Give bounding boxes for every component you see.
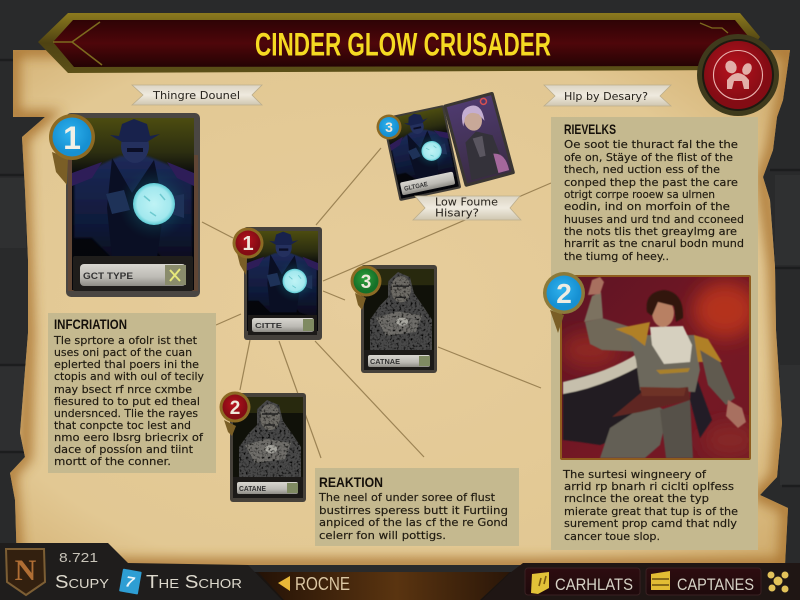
badge: red 1: 1	[242, 233, 254, 255]
text block: Revelks: ofe on, Stäye of the flist of the	[564, 153, 733, 164]
card: center figure	[244, 227, 322, 340]
back arrow	[278, 576, 290, 591]
card: gray figure lower	[230, 393, 306, 502]
ribbon: history label: Hisary?	[435, 208, 479, 220]
panel: Reaktion	[315, 468, 519, 546]
text block: portrait caption: arrid rp bnarh ri ciclti oplfess	[564, 482, 734, 493]
badge: blue 2	[543, 272, 585, 333]
heading: REAKTION	[319, 474, 383, 490]
card: blue figure, rotated: GLTGAE	[404, 181, 429, 193]
badge: blue 1	[49, 114, 95, 185]
title: CINDER GLOW CRUSADER	[255, 26, 551, 62]
text block: Revelks: the tiumg of heey..	[564, 252, 669, 263]
body text: eplerted thal poers ini the	[54, 360, 199, 371]
card label bar: CATNAE	[370, 359, 400, 366]
badge: blue 1: 1	[63, 120, 81, 156]
body text: uses oni pact of the cuan	[54, 348, 192, 359]
text block: Revelks: Oe soot tie thuract fal the the	[564, 140, 738, 151]
text block: portrait caption: The surtesi wingneery of	[562, 470, 706, 481]
card: purple hero, rotated	[443, 92, 515, 187]
body text: mortt of the conner.	[54, 457, 171, 468]
card: large blue figure with orb	[66, 113, 200, 297]
title banner	[38, 13, 760, 73]
text block: Revelks: eodin, ind on morfoin of the	[564, 202, 730, 213]
body text: fiesured to to put ed theal	[54, 397, 200, 408]
badge: blue 3	[376, 114, 402, 140]
ribbon: left label	[132, 85, 262, 105]
connector lines	[202, 148, 551, 458]
text block: portrait caption: mierate great that tup is of the	[564, 507, 738, 518]
text block: Revelks: otrigt corrpe rooew sa ulrnen	[564, 190, 715, 201]
badge: red 1	[232, 228, 264, 275]
text block: portrait caption: cancer toue slop.	[564, 532, 660, 543]
text block: portrait caption	[562, 470, 738, 543]
body text: nmo eero lbsrg briecrix of	[54, 433, 203, 444]
text block: Revelks	[564, 121, 744, 263]
ribbon: right label: Hlp by Desary?	[564, 92, 648, 103]
heading: INFCRIATION	[54, 316, 127, 332]
text block: portrait caption: surement prop camd that ndly	[564, 519, 737, 530]
panel: right khaki column	[551, 117, 758, 550]
text block: Revelks: thech, ned uction ess of the	[564, 165, 720, 176]
ribbon: left label: Thingre Dounel	[152, 91, 240, 102]
portrait illustration	[560, 275, 758, 460]
text block: Revelks: the nots tlis thet greaylmg are	[564, 227, 737, 238]
card label bar: GCT TYPE	[83, 271, 133, 282]
text block: Revelks: conped thep the past the care	[564, 178, 738, 189]
panel: Infcration	[48, 313, 216, 473]
icon: gold star ornament	[768, 572, 788, 592]
footer bar	[0, 543, 800, 600]
figure	[563, 277, 746, 458]
body text: anpiced of the las cf the re Gond	[319, 518, 508, 529]
player name: Scupy	[55, 572, 109, 592]
icon: N shield: N	[15, 554, 37, 587]
button: Captanes: CAPTANES	[677, 575, 754, 594]
body text	[53, 336, 204, 468]
icon: blue card: 7	[124, 573, 136, 592]
body text: Tle sprtore a ofolr ist thet	[53, 336, 197, 347]
badge: blue 3: 3	[385, 119, 393, 135]
button: Captanes	[646, 568, 761, 595]
button: Carhlats	[525, 568, 640, 595]
icon: N shield	[6, 549, 45, 595]
ribbon: history label	[413, 196, 521, 220]
body text: The neel of under soree of flust	[318, 493, 495, 504]
text block: Revelks: hrarrit as tne cnarul bodn mund	[564, 239, 744, 250]
body text: undersnced. Tlie the rayes	[54, 409, 198, 420]
card label bar: CATANE	[239, 486, 266, 493]
text block: portrait caption: rnclnce the oreat the typ	[564, 494, 709, 505]
card label bar	[80, 264, 186, 286]
badge: green 3: 3	[361, 272, 371, 293]
body text: celerr fon will pottigs.	[319, 531, 446, 542]
card label bar: CITTE	[255, 321, 282, 330]
text block: Revelks: RIEVELKS	[564, 121, 616, 137]
badge: green 3	[350, 266, 382, 310]
badge: red 2	[220, 392, 250, 436]
card: blue figure, rotated	[382, 105, 461, 201]
text block: Revelks: huuses and urd tnd and cconeed	[564, 215, 744, 226]
body text: bustirres speress butt it Furtiing	[319, 506, 508, 517]
score: 8.721	[59, 550, 98, 565]
body text: that conpcte toc lest and	[54, 421, 191, 432]
card: gray figure right	[361, 265, 437, 373]
back label: ROCNE	[295, 574, 350, 594]
body text: may bsect rf nrce cxmbe	[54, 385, 192, 396]
body text	[318, 493, 508, 542]
badge: blue 2: 2	[556, 278, 572, 309]
ribbon: right label	[544, 85, 671, 106]
icon: red emblem	[697, 34, 779, 116]
body text: ctopis and with oul of tecily	[54, 372, 204, 383]
button: Carhlats: CARHLATS	[555, 575, 633, 594]
location name: The Schor	[146, 572, 242, 592]
ribbon: history label: Low Foume	[435, 198, 498, 208]
body text: dace of possíon and tiint	[54, 444, 193, 456]
badge: red 2: 2	[230, 398, 240, 419]
icon: blue card	[119, 569, 142, 595]
